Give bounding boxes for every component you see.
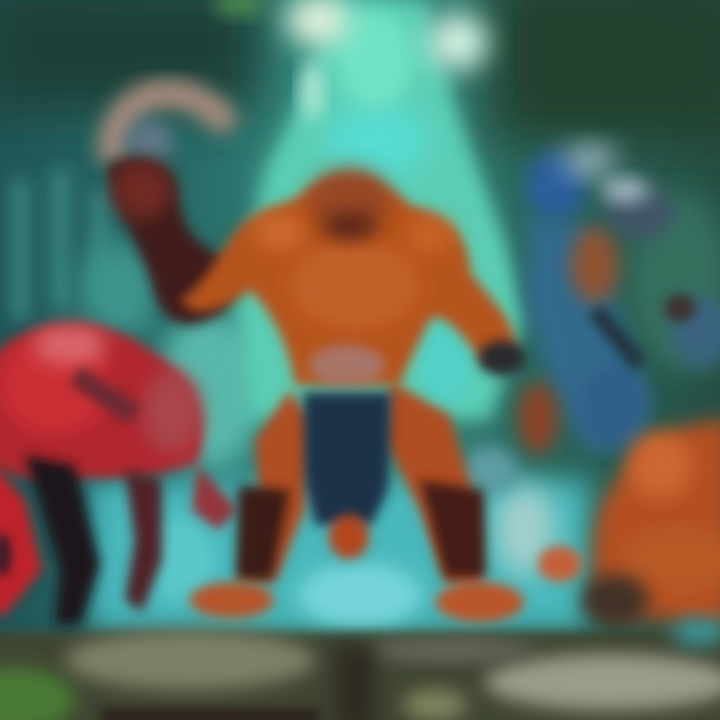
waterfall bbox=[235, 0, 525, 420]
chest bbox=[290, 240, 420, 330]
torso bbox=[180, 177, 515, 385]
raised claw bbox=[112, 93, 222, 150]
water pool bbox=[90, 323, 590, 630]
head bbox=[310, 168, 390, 232]
legs bbox=[240, 390, 310, 582]
claw grip bbox=[126, 120, 174, 160]
trousers bbox=[303, 392, 392, 525]
creature: central orange brute bbox=[108, 93, 558, 622]
feet bbox=[190, 582, 274, 618]
raised forearm bbox=[108, 158, 240, 324]
right hand bbox=[518, 382, 558, 454]
groin patch bbox=[329, 515, 369, 559]
creature: red beast left bbox=[0, 324, 238, 625]
belt bbox=[309, 345, 385, 385]
creature: blue fighter right bbox=[525, 144, 720, 450]
creature: orange beast lower right bbox=[538, 420, 720, 646]
rocky foreground bbox=[0, 630, 720, 720]
right gauntlet bbox=[478, 340, 526, 376]
